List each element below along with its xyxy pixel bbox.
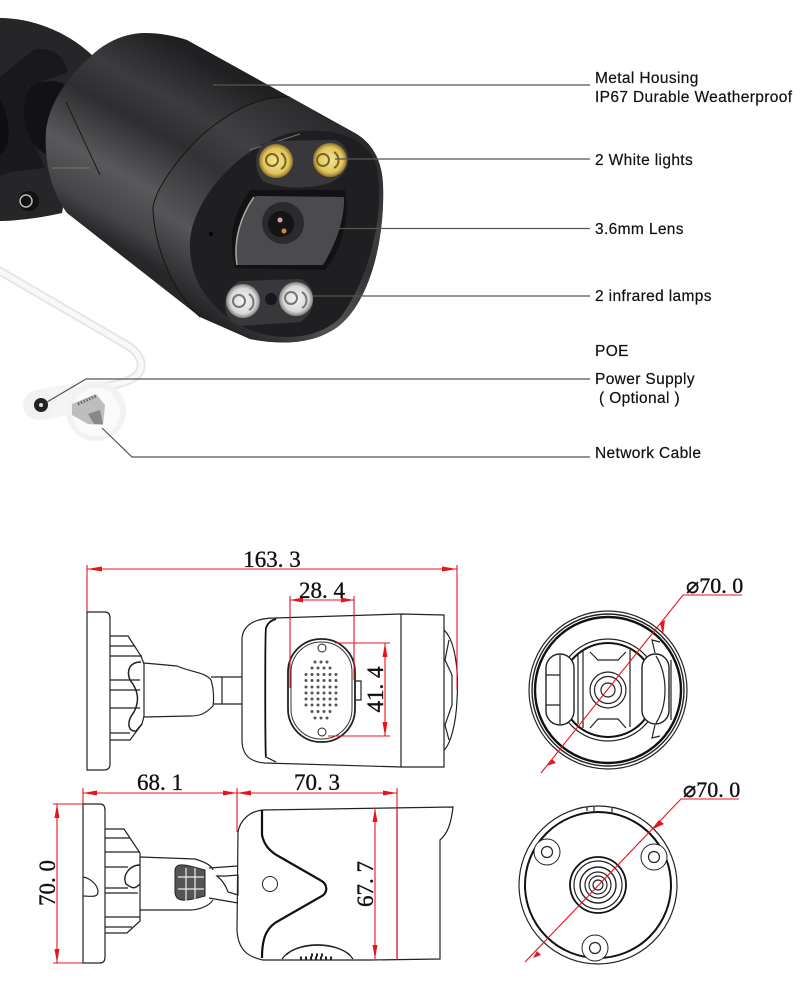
body <box>242 614 444 767</box>
front collar <box>153 97 383 342</box>
front face <box>190 131 379 337</box>
dimension: top diameter 70.0 <box>541 573 743 773</box>
dimension: 28.4: 28. 4 <box>299 578 346 603</box>
drawing: bottom side view <box>83 804 453 963</box>
label: power supply: ( Optional ) <box>599 390 680 407</box>
dimension: 70.0 vertical <box>35 804 83 963</box>
label: metal housing: Metal Housing <box>595 70 699 87</box>
callout lines <box>47 85 590 457</box>
label: power supply: Power Supply <box>595 371 695 388</box>
label: white lights: 2 White lights <box>595 152 693 169</box>
dimension: 163.3 <box>87 547 457 690</box>
dimension: 67.7 <box>353 808 378 959</box>
dimension: 68.1 <box>83 770 237 832</box>
dimension: 67.7: 67. 7 <box>353 861 378 907</box>
wall bracket <box>0 18 92 221</box>
speaker grill <box>288 639 361 742</box>
mount plate <box>87 612 110 770</box>
infrared lamp module <box>225 279 314 326</box>
label: POE: POE <box>595 343 629 360</box>
dimension: 70.0 vertical: 70. 0 <box>35 860 60 906</box>
arm <box>144 663 214 717</box>
label: lens: 3.6mm Lens <box>595 221 684 238</box>
dimension: 70.3: 70. 3 <box>294 770 340 795</box>
drawing: top side view <box>87 612 457 770</box>
dimension: 41.4: 41. 4 <box>363 666 388 712</box>
dimension: bottom diameter 70.0 <box>525 777 740 962</box>
label: infrared lamps: 2 infrared lamps <box>595 288 712 305</box>
dimension: 68.1: 68. 1 <box>137 770 183 795</box>
dimension: top diameter 70.0: ⌀70. 0 <box>686 573 743 598</box>
power and network cable <box>0 270 141 441</box>
dimension: 70.3 <box>237 770 397 960</box>
lens window <box>232 190 347 270</box>
camera photo <box>0 18 383 342</box>
dimension: 41.4 <box>328 643 390 736</box>
arm and joint <box>140 857 213 910</box>
dimension: 163.3: 163. 3 <box>243 547 301 572</box>
dimension: bottom diameter 70.0: ⌀70. 0 <box>683 777 740 802</box>
mic hole <box>209 232 213 236</box>
label: network cable: Network Cable <box>595 445 701 462</box>
white light module <box>256 140 349 188</box>
label: metal housing: IP67 Durable Weatherproof <box>595 89 793 106</box>
body <box>237 807 453 960</box>
label: power supply <box>595 371 695 407</box>
dimension: 28.4 <box>290 578 354 688</box>
housing cylinder <box>46 33 383 342</box>
drawing: front mount view <box>519 806 677 964</box>
label: metal housing <box>595 70 793 106</box>
drawing: rear view <box>529 611 687 769</box>
